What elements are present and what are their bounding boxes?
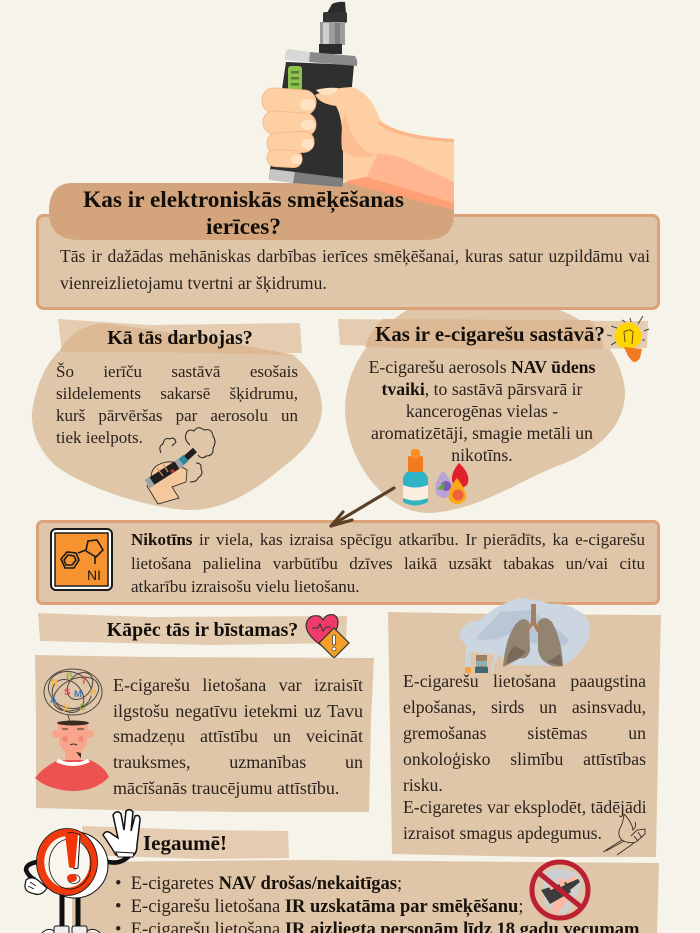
text: how they work: kurš pārvēršas par aerosolu un bbox=[56, 406, 298, 425]
tape: how it works heading bbox=[58, 319, 302, 354]
tape: e-cigarette composition heading bbox=[338, 319, 648, 350]
text: nicotine: atkarību izraisošu vielu lietošanu. bbox=[131, 577, 360, 596]
icon: head and tangled thoughts: P bbox=[90, 688, 97, 699]
panel: nicotine bbox=[38, 522, 658, 604]
icon: crossed-out vape bbox=[532, 862, 588, 918]
blob: e-cigarette composition background bbox=[345, 310, 625, 513]
text: body effects: onkoloģisko slimību attīstības bbox=[403, 749, 646, 769]
text: e-cigarette composition: kancerogēnas vielas - bbox=[406, 401, 558, 421]
text: brain effects: mācīšanās traucējumu attīstību. bbox=[113, 778, 339, 798]
list: key takeaways bbox=[115, 874, 639, 933]
heading: why dangerous: Kāpēc tās ir bīstamas? bbox=[107, 619, 298, 641]
text: explosion risk bbox=[403, 797, 647, 843]
text: explosion risk: E-cigaretes var eksplodēt, tādējādi bbox=[403, 797, 647, 817]
text: e-cigarette composition bbox=[369, 357, 595, 465]
icon: flavour drops bbox=[435, 463, 468, 504]
icon: liquid bottle bbox=[403, 449, 428, 506]
title: what are electronic smoking devices bbox=[83, 187, 404, 240]
icon: vape and smoke bbox=[147, 428, 215, 504]
text: brain effects: ilgstošu negatīvu ietekmi uz Tavu bbox=[113, 701, 363, 721]
tape overlap: how it works heading bbox=[60, 324, 297, 356]
text: brain effects: smadzeņu attīstību un veicināt bbox=[113, 726, 363, 746]
text: body effects: E-cigarešu lietošana paaugstina bbox=[403, 671, 646, 691]
icon: nicotine hazard label: NI bbox=[87, 567, 101, 583]
text: how they work: Šo ierīču sastāvā esošais bbox=[56, 362, 298, 381]
heading: e-cigarette composition: Kas ir e-cigarešu sastāvā? bbox=[375, 323, 605, 346]
icon: lungs and smoke bbox=[459, 598, 590, 673]
text: how they work: sildelements sakarsē šķidrumu, bbox=[56, 384, 298, 403]
text: brain effects: trauksmes, uzmanības un bbox=[113, 752, 363, 772]
panel: what are the devices bbox=[38, 216, 658, 308]
text: brain effects bbox=[113, 675, 363, 798]
title pill bbox=[49, 183, 454, 240]
icon: light bulb bbox=[607, 316, 649, 362]
text: e-cigarette composition: aromatizētāji, smagie metāli un bbox=[371, 423, 593, 443]
arrow: from composition to nicotine bbox=[331, 488, 394, 526]
tape: why dangerous heading bbox=[38, 613, 347, 645]
text: body effects bbox=[403, 671, 646, 795]
text: brain effects: E-cigarešu lietošana var izraisīt bbox=[113, 675, 363, 695]
icon: head and tangled thoughts: A bbox=[50, 695, 57, 706]
text: body effects: gremošanas sistēmas un bbox=[403, 723, 646, 743]
text: e-cigarette composition: nikotīns. bbox=[451, 445, 513, 465]
heading: how do they work: Kā tās darbojas? bbox=[107, 327, 253, 349]
tape overlap: e-cigarette composition heading bbox=[365, 319, 604, 350]
text: body effects: elpošanas, sirds un asinsvadu, bbox=[403, 697, 646, 717]
icon: head and tangled thoughts: R bbox=[51, 678, 58, 689]
panel: key takeaways bbox=[72, 860, 659, 933]
text: how they work: tiek ieelpots. bbox=[56, 428, 143, 447]
icon: head and tangled thoughts: C bbox=[79, 702, 86, 713]
icon: head and tangled thoughts: B bbox=[66, 671, 73, 682]
icon: head and tangled thoughts: S bbox=[64, 687, 70, 698]
icon: nicotine hazard label bbox=[51, 529, 112, 590]
title: what are electronic smoking devices: Kas ir elektroniskās smēķēšanas bbox=[83, 187, 404, 213]
title: what are electronic smoking devices: ierīces? bbox=[206, 214, 281, 240]
text: nicotine: lietošana palielina varbūtību dzīves laikā uzsākt tabakas un/vai citu bbox=[131, 554, 645, 572]
illustration: hand holding vape device bbox=[261, 2, 454, 210]
icon: burned hand bbox=[603, 814, 645, 855]
blob: how it works bbox=[32, 324, 322, 510]
icon: head and tangled thoughts: M bbox=[74, 689, 82, 700]
text: e-cigarette composition: E-cigarešu aerosols NAV ūdens bbox=[369, 357, 595, 377]
text: e-cigarette composition: tvaiki, to sastāvā pārsvarā ir bbox=[382, 379, 582, 399]
text: nicotine: Nikotīns ir viela, kas izraisa spēcīgu atkarību. Ir pierādīts, ka e-cigarešu bbox=[131, 530, 645, 549]
list: key takeaways: • E-cigaretes NAV drošas/nekaitīgas; bbox=[115, 874, 402, 894]
text: devices definition: vienreizlietojamu tvertni ar šķidrumu. bbox=[60, 273, 327, 293]
text: devices definition: Tās ir dažādas mehāniskas darbības ierīces smēķēšanai, kuras satur uzpildāmu vai bbox=[60, 246, 650, 266]
panel: remember heading tape bbox=[82, 826, 289, 859]
text: how they work bbox=[56, 362, 298, 447]
icon: head and tangled thoughts bbox=[35, 666, 109, 791]
icon: head and tangled thoughts: T bbox=[81, 676, 87, 687]
icon: head and tangled thoughts: X bbox=[63, 703, 70, 714]
text: body effects: risku. bbox=[403, 775, 443, 795]
character: exclamation mascot bbox=[25, 810, 140, 933]
list: key takeaways: • E-cigarešu lietošana IR uzskatāma par smēķēšanu; bbox=[115, 897, 523, 917]
panel: body effects bbox=[388, 612, 661, 857]
text: explosion risk: izraisot smagus apdegumus. bbox=[403, 823, 602, 843]
panel: brain effects bbox=[35, 655, 374, 812]
heading: remember: Iegaumē! bbox=[143, 831, 227, 855]
icon: heart and warning bbox=[306, 615, 349, 658]
text: devices definition bbox=[60, 246, 650, 293]
text: nicotine bbox=[131, 530, 645, 596]
